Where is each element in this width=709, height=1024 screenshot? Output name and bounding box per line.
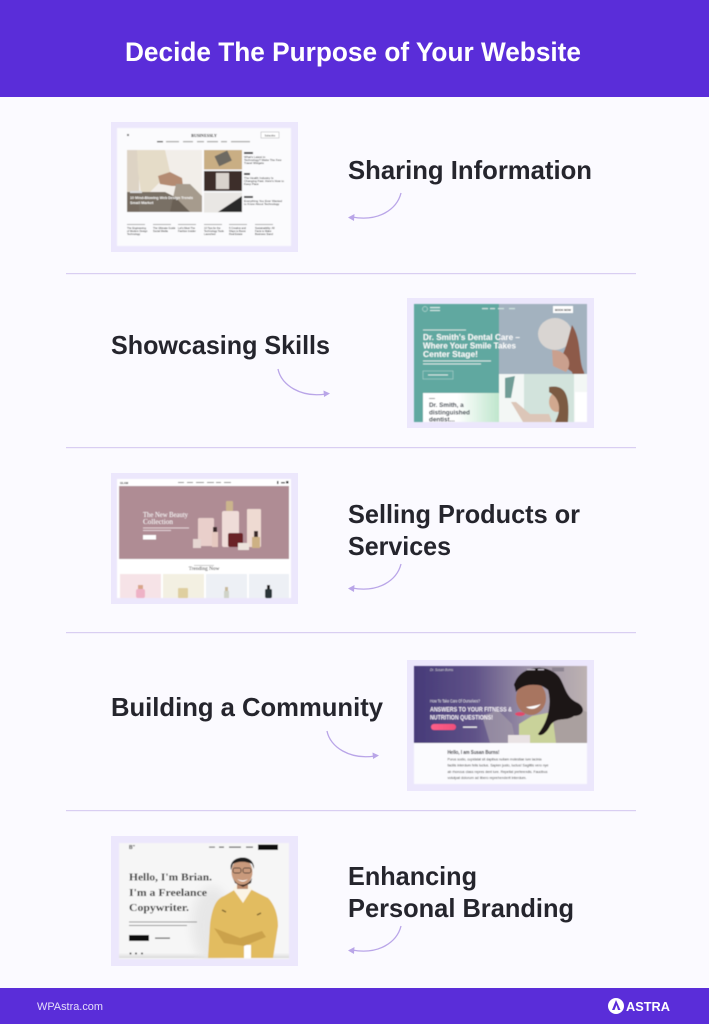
section 5 screenshot: copywriter site: B" (129, 845, 136, 851)
section 5 screenshot: copywriter site (111, 836, 298, 966)
section 2 screenshot: dental site: Center Stage! (423, 349, 478, 359)
section 3 screenshot: beauty store: Trending Now (189, 566, 220, 572)
hero photo: How To Take Care Of Ourselves? (430, 698, 480, 704)
heading: Selling Products or Services: Selling Products or (348, 499, 580, 529)
heading: Enhancing Personal Branding: Personal Branding (348, 893, 574, 923)
footer band (0, 988, 709, 1024)
section 1 screenshot: news site: The Ultimate Guide (153, 226, 176, 230)
hero photo (127, 150, 202, 212)
hero photo: Dr. Susan Burns (430, 668, 454, 672)
arrow: section 4 (327, 731, 379, 759)
section 1 screenshot: news site: 10 Tips for the (204, 226, 221, 230)
section 1 screenshot: news site: Technology? Make The Few (244, 158, 282, 162)
section 1 screenshot: news site: Technology Tools (204, 229, 225, 233)
section 1 screenshot: news site: BUSINESSLY (191, 133, 217, 138)
hero photo: NUTRITION QUESTIONS! (430, 714, 493, 722)
arrow: section 2 (278, 369, 330, 397)
heading: Sharing Information: Sharing Information (348, 155, 592, 185)
heading: Enhancing Personal Branding: Enhancing (348, 861, 477, 891)
hero banner: The New Beauty (143, 511, 188, 519)
section 1 screenshot: news site: Fashion Insider (178, 229, 196, 233)
section 5 screenshot: copywriter site: Copywriter. (129, 902, 189, 914)
arrow: section 3 (348, 564, 401, 592)
heading: Building a Community: Building a Community (111, 692, 384, 722)
section 4 screenshot: fitness site: Hello, I am Susan Burns! (448, 750, 500, 756)
section 1 screenshot: news site (111, 122, 298, 252)
section 4 screenshot: fitness site: ab rhoncus class repres dent iure. Repellat preferendis. Faucibus (448, 769, 548, 774)
section 1 screenshot: news site: What's Latest in (244, 155, 266, 159)
header band (0, 0, 709, 97)
section 1 screenshot: news site: 5 Creative and (229, 226, 246, 230)
section 1 screenshot: news site: Sustainability: All (255, 226, 275, 230)
hero photo: Small Market (130, 201, 154, 205)
section 2 screenshot: dental site: distinguished (429, 410, 470, 416)
title: Decide The Purpose of Your Website (125, 37, 581, 67)
section 1 screenshot: news site: Travel Widgets (244, 161, 264, 165)
hero photo (414, 666, 587, 743)
arrow: section 5 (348, 926, 401, 954)
section 1 screenshot: news site: Subscribe (265, 134, 276, 138)
section 1 screenshot: news site: Ways to Boost (229, 229, 246, 233)
section 1 screenshot: news site: to Know About Technology (244, 202, 280, 206)
section 1 screenshot: news site: of Modern Design (127, 229, 148, 233)
section 1 screenshot: news site: Social Media (153, 229, 168, 233)
section 1 screenshot: news site: Technology (127, 232, 141, 236)
section 1 screenshot: news site: Let's Meet The (178, 226, 196, 230)
section 2 screenshot: dental site (407, 298, 594, 428)
section 4 screenshot: fitness site: Purus sodio, cupidatat sit dapibus nullam molestiae iure lacinia (448, 756, 542, 762)
heading: Enhancing Personal Branding (348, 861, 574, 923)
hero banner: Collection (143, 518, 173, 526)
section 2 screenshot: dental site: BOOK NOW (555, 308, 571, 312)
section 4 screenshot: fitness site (407, 660, 594, 791)
section 1 screenshot: news site: Real Estate (229, 232, 243, 236)
section 1 screenshot: news site: Business Stand (255, 232, 274, 236)
section 1 screenshot: news site: Everything You Ever Wanted (244, 199, 282, 203)
section 1 screenshot: news site: Keep Pace (244, 182, 259, 186)
section 5 screenshot: copywriter site: Hello, I'm Brian. (129, 872, 212, 884)
section 2 screenshot: dental site: Dr. Smith, a (429, 402, 464, 409)
heading: Showcasing Skills: Showcasing Skills (111, 330, 330, 360)
hero photo: ANSWERS TO YOUR FITNESS & (430, 706, 512, 714)
icon: Astra logo: ASTRA (626, 1000, 670, 1014)
footer site name: WPAstra.com (37, 1001, 103, 1013)
section 5 screenshot: copywriter site: I'm a Freelance (129, 887, 207, 899)
person (208, 857, 278, 958)
section 1 screenshot: news site: The Engineering (127, 226, 147, 230)
section 2 screenshot: dental site: Dr. Smith's Dental Care – (423, 332, 520, 342)
section 3 screenshot: beauty store: GLAM (120, 481, 129, 485)
hero banner (119, 486, 289, 559)
section 3 screenshot: beauty store (111, 473, 298, 604)
section 1 screenshot: news site: Launched (204, 232, 216, 236)
section 4 screenshot: fitness site: volutpat dolorum ad libero reprehenderit interdum. (448, 775, 526, 780)
section 4 screenshot: fitness site: facilis interdum felis luctus. Sapien justo, luctus! Sagittis vero nye (448, 762, 549, 768)
heading: Selling Products or Services: Services (348, 531, 451, 561)
icon: Astra logo (608, 998, 670, 1014)
section 1 screenshot: news site: The Health Industry Is (244, 176, 274, 180)
section 2 screenshot: dental site: Where Your Smile Takes (423, 340, 516, 350)
section 1 screenshot: news site: Facts to Make (255, 229, 272, 233)
section 2 screenshot: dental site: dentist... (429, 416, 455, 424)
section 1 screenshot: news site: Changing Fast. Here's How to (244, 179, 284, 183)
arrow: section 1 (348, 193, 401, 221)
hero photo: 10 Mind-Blowing Web Design Trends (130, 196, 193, 200)
heading: Selling Products or Services (348, 499, 580, 561)
